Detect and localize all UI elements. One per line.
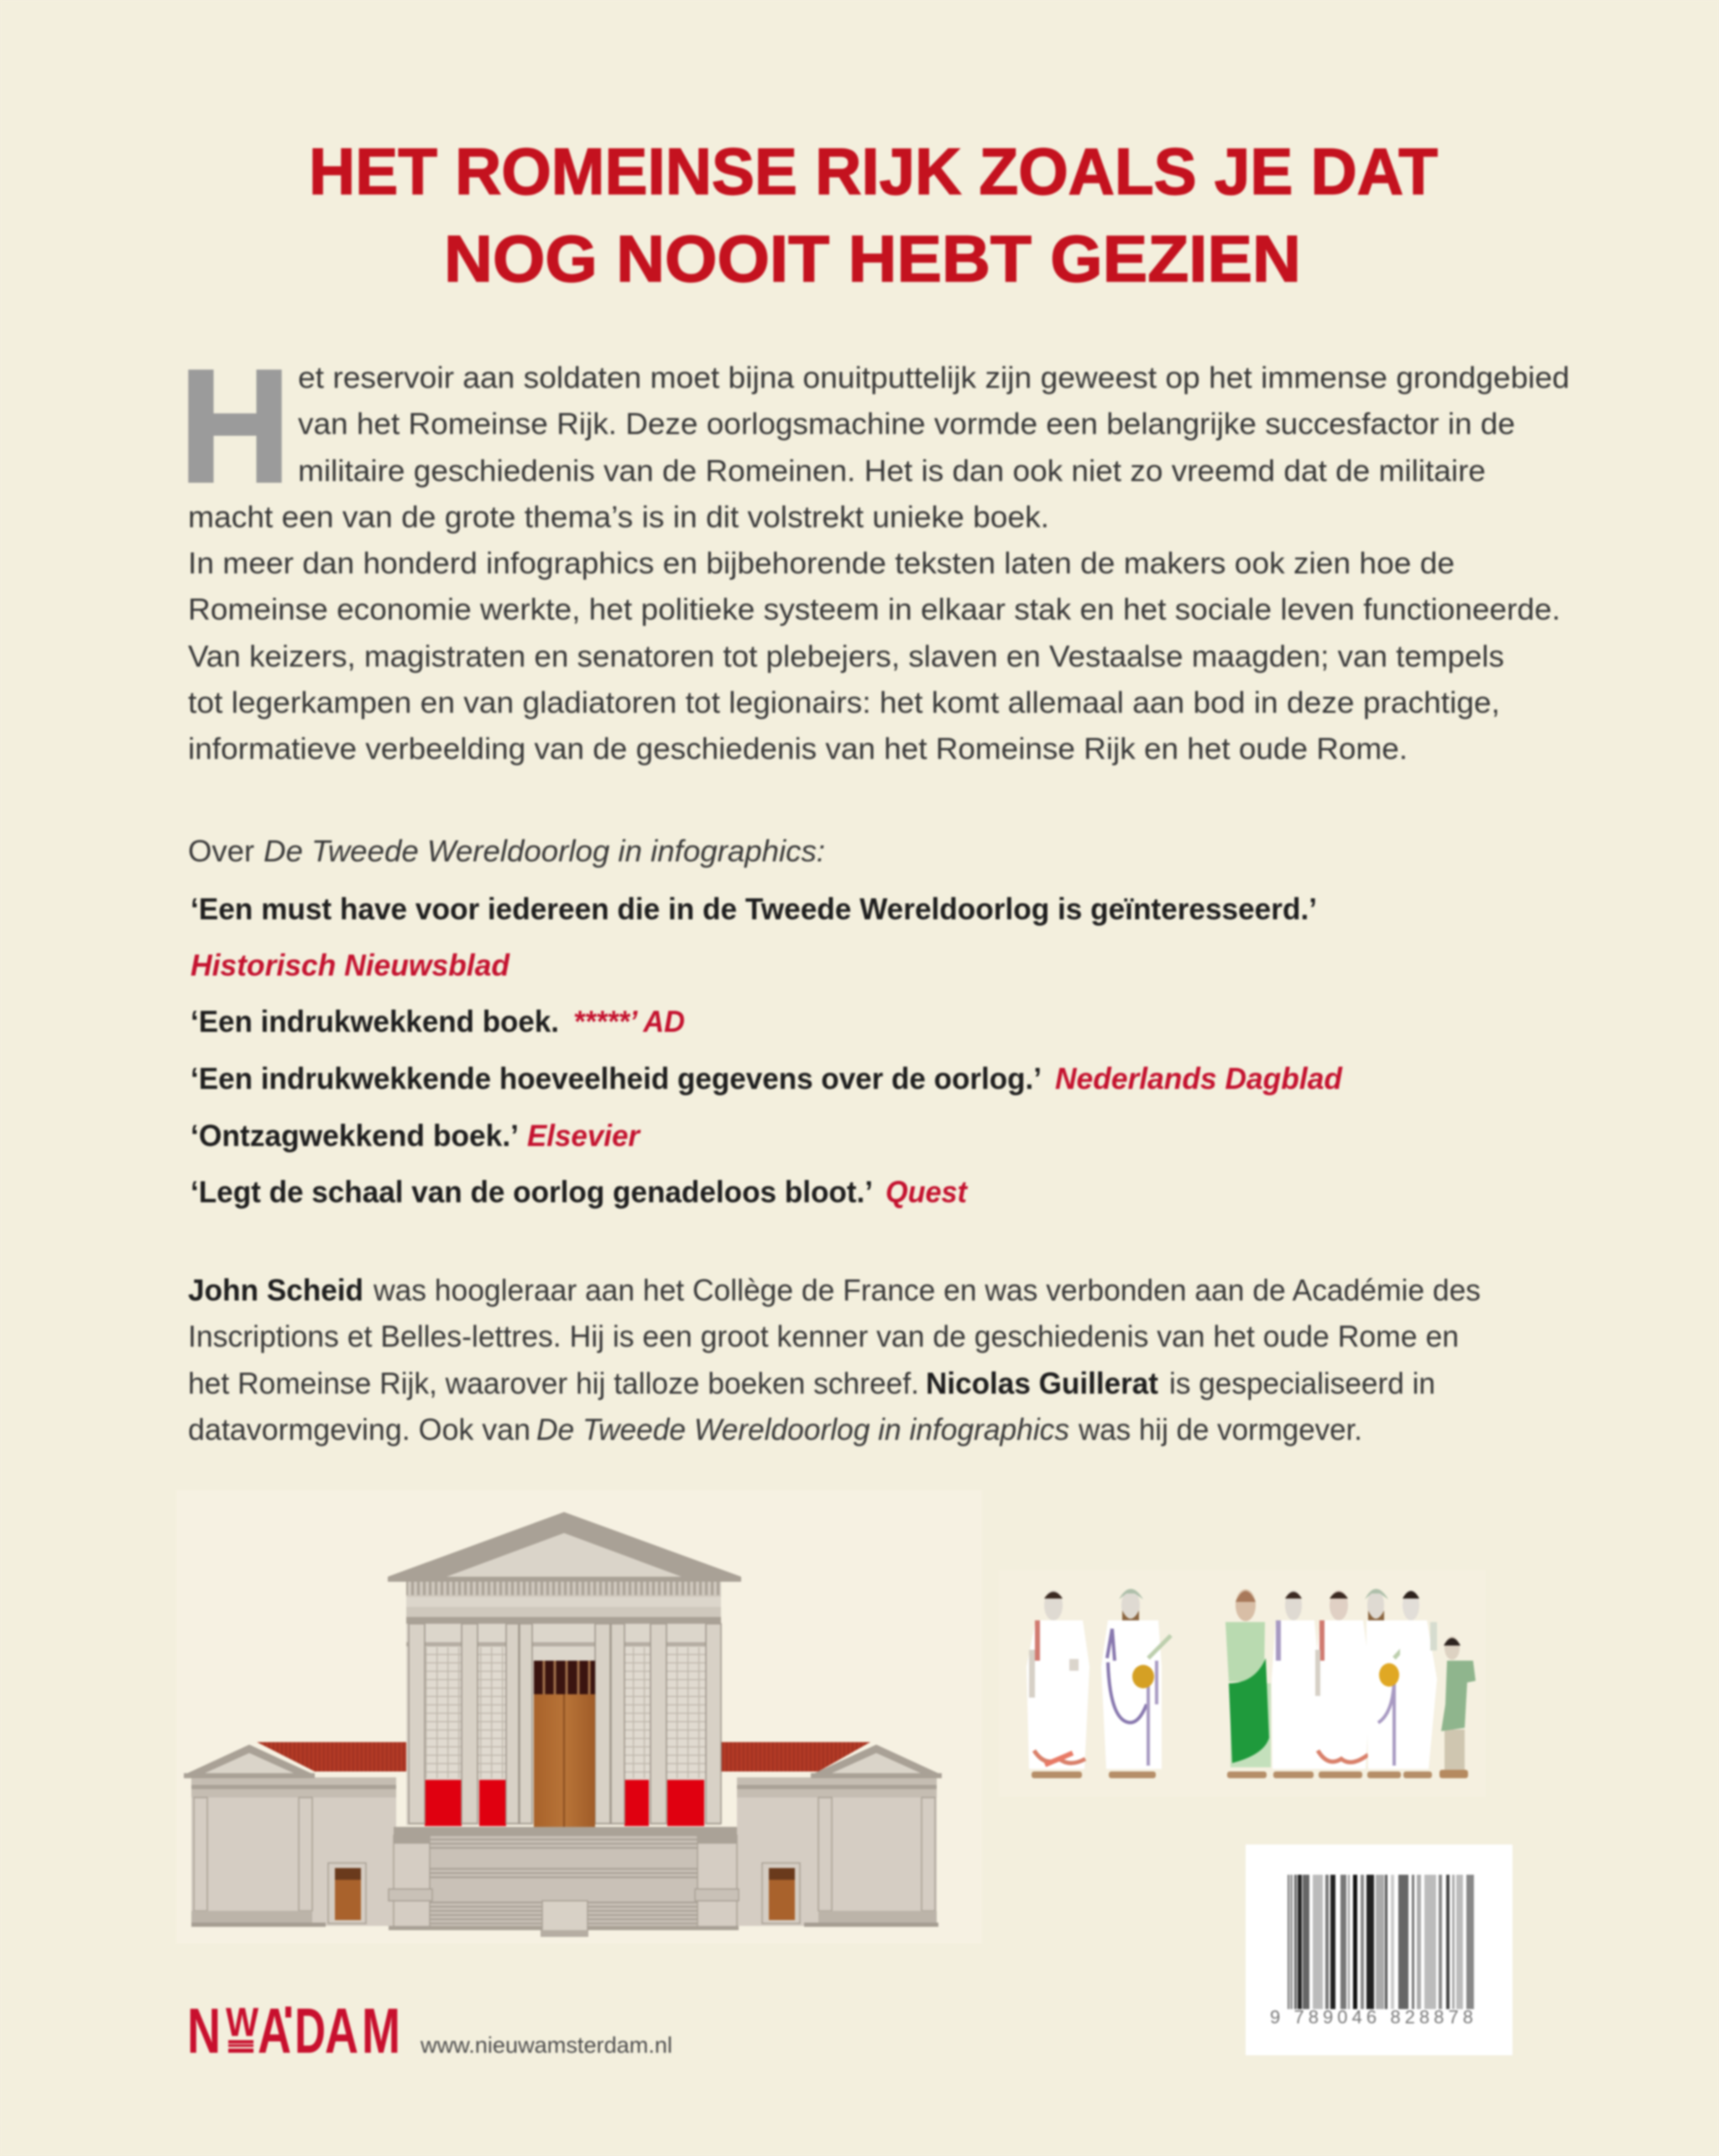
figure: second augur with staff <box>1365 1588 1413 1778</box>
author biography: John Scheid <box>188 1273 363 1307</box>
author biography: is gespecialiseerd in <box>1169 1366 1435 1400</box>
publisher logo: W <box>226 2001 259 2045</box>
intro text block: Romeinse economie werkte, het politieke systeem in elkaar stak en het sociale leven functioneerde. <box>188 592 1560 626</box>
author biography <box>188 1273 1481 1447</box>
publisher logo: D <box>295 1996 326 2067</box>
illustration: Roman temple <box>176 1490 982 1944</box>
intro text block: In meer dan honderd infographics en bijbehorende teksten laten de makers ook zien hoe de <box>188 546 1455 580</box>
figure: boy in green tunic <box>1439 1636 1476 1778</box>
review quotes: *****’ AD <box>573 1004 685 1039</box>
right wing <box>737 1745 942 1927</box>
intro text block: Van keizers, magistraten en senatoren tot plebejers, slaven en Vestaalse maagden; van tempels <box>188 639 1504 673</box>
intro text block: et reservoir aan soldaten moet bijna onuitputtelijk zijn geweest op het immense grondgebied <box>298 360 1570 395</box>
author biography: De Tweede Wereldoorlog in infographics <box>536 1412 1069 1447</box>
small left door <box>328 1863 366 1923</box>
intro text block <box>188 360 1570 766</box>
columns <box>409 1624 721 1824</box>
review quotes: Over <box>188 834 254 868</box>
barcode <box>1246 1845 1513 2055</box>
author biography: het Romeinse Rijk, waarover hij talloze boeken schreef. <box>188 1366 919 1400</box>
entablature and pediment <box>388 1512 741 1624</box>
figure: attendant in toga <box>1400 1590 1437 1778</box>
central door <box>534 1661 595 1827</box>
review quotes: ‘Ontzagwekkend boek.’ <box>191 1118 519 1153</box>
illustration: Roman figures <box>999 1570 1486 1797</box>
figure: augur with staff <box>1101 1588 1171 1778</box>
figure: priest with stool <box>1027 1590 1089 1778</box>
author biography: Nicolas Guillerat <box>926 1366 1158 1400</box>
drop cap H: H <box>180 338 290 515</box>
figure: senator with purple stripe <box>1272 1590 1319 1778</box>
review quotes <box>188 834 1343 1209</box>
review quotes: Historisch Nieuwsblad <box>191 948 510 982</box>
publisher logo: A <box>258 1996 291 2067</box>
small right door <box>762 1863 800 1923</box>
red banners <box>425 1780 704 1826</box>
review quotes: ‘Een indrukwekkende hoeveelheid gegevens over de oorlog.’ <box>191 1061 1042 1096</box>
roof tiles <box>257 1742 870 1771</box>
author biography: datavormgeving. Ook van <box>188 1412 530 1447</box>
review quotes: ‘Een indrukwekkend boek. <box>191 1004 559 1039</box>
title <box>309 134 1438 296</box>
publisher logo: M <box>362 1996 400 2067</box>
author biography: was hoogleraar aan het Collège de France en was verbonden aan de Académie des <box>373 1273 1481 1307</box>
review quotes: ‘Een must have voor iedereen die in de Tweede Wereldoorlog is geïnteresseerd.’ <box>191 892 1317 926</box>
review quotes: ‘Legt de schaal van de oorlog genadeloos bloot.’ <box>191 1175 873 1209</box>
author biography: was hij de vormgever. <box>1078 1412 1362 1447</box>
intro text block: militaire geschiedenis van de Romeinen. Het is dan ook niet zo vreemd dat de militaire <box>298 453 1486 488</box>
review quotes: Elsevier <box>527 1118 641 1153</box>
website url: www.nieuwamsterdam.nl <box>420 2033 672 2058</box>
intro text block: tot legerkampen en van gladiatoren tot legionairs: het komt allemaal aan bod in deze prachtige, <box>188 685 1500 720</box>
review quotes: Quest <box>886 1175 969 1209</box>
review quotes: Nederlands Dagblad <box>1055 1061 1343 1096</box>
publisher logo <box>187 1996 400 2067</box>
barcode bars <box>1288 1875 1474 2009</box>
publisher logo: N <box>187 1996 221 2067</box>
intro text block: van het Romeinse Rijk. Deze oorlogsmachine vormde een belangrijke succesfactor in de <box>298 406 1515 441</box>
figure: man in green toga <box>1225 1589 1271 1778</box>
barcode digits: 9 789046 828878 <box>1270 2007 1473 2028</box>
publisher logo: A <box>325 1996 358 2067</box>
intro text block: informatieve verbeelding van de geschiedenis van het Romeinse Rijk en het oude Rome. <box>188 731 1408 766</box>
title: HET ROMEINSE RIJK ZOALS JE DAT <box>309 134 1438 208</box>
left wing <box>184 1745 396 1927</box>
author biography: Inscriptions et Belles-lettres. Hij is een groot kenner van de geschiedenis van het oude Rome en <box>188 1319 1459 1353</box>
figure: second priest with stool <box>1314 1590 1371 1778</box>
main temple cella <box>406 1582 721 1825</box>
podium and stairs <box>389 1827 739 1937</box>
title: NOG NOOIT HEBT GEZIEN <box>444 222 1301 296</box>
intro text block: macht een van de grote thema’s is in dit volstrekt unieke boek. <box>188 500 1049 534</box>
review quotes: De Tweede Wereldoorlog in infographics: <box>264 834 825 868</box>
